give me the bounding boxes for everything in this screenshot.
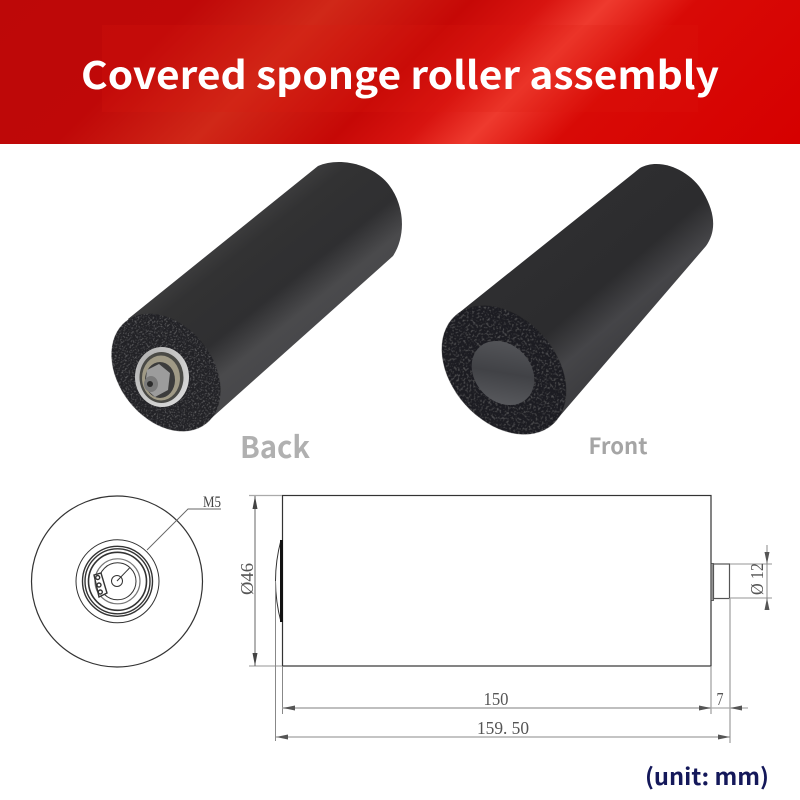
roller body	[455, 164, 713, 424]
dimension: 159.50: 159. 50	[477, 718, 529, 738]
dimension: 150	[282, 689, 711, 710]
dimension: diameter 12	[747, 545, 770, 610]
dimension: 7	[711, 689, 748, 710]
shaft	[711, 564, 730, 600]
label: Front: Front	[588, 429, 648, 461]
roller body	[128, 162, 402, 423]
side view drawing	[249, 496, 772, 743]
dimension: 7: 7	[716, 689, 724, 709]
dimension: diameter 46	[237, 496, 258, 666]
header banner	[0, 0, 800, 144]
unit note: (unit: mm)	[645, 758, 769, 792]
centre hole	[459, 328, 547, 418]
photo: front roller	[417, 164, 713, 459]
label: Back: Back	[240, 423, 310, 467]
dimension: 159.50	[276, 718, 730, 740]
leader: M5: M5	[203, 494, 221, 511]
circlip lug	[94, 573, 107, 597]
roller outline	[282, 496, 711, 666]
title: Covered sponge roller assembly	[81, 45, 719, 100]
photo: back roller	[89, 162, 402, 453]
foam end face	[89, 292, 243, 453]
foam end face	[417, 281, 591, 459]
dimension: diameter 12: Ø 12	[747, 563, 767, 595]
bearing	[135, 347, 189, 407]
leader: M5	[117, 494, 221, 581]
domed end cap	[276, 540, 282, 622]
dimension: 150: 150	[484, 689, 508, 709]
dimension: diameter 46: Ø46	[237, 563, 257, 595]
extension lines	[249, 496, 772, 666]
end view drawing	[32, 494, 221, 667]
